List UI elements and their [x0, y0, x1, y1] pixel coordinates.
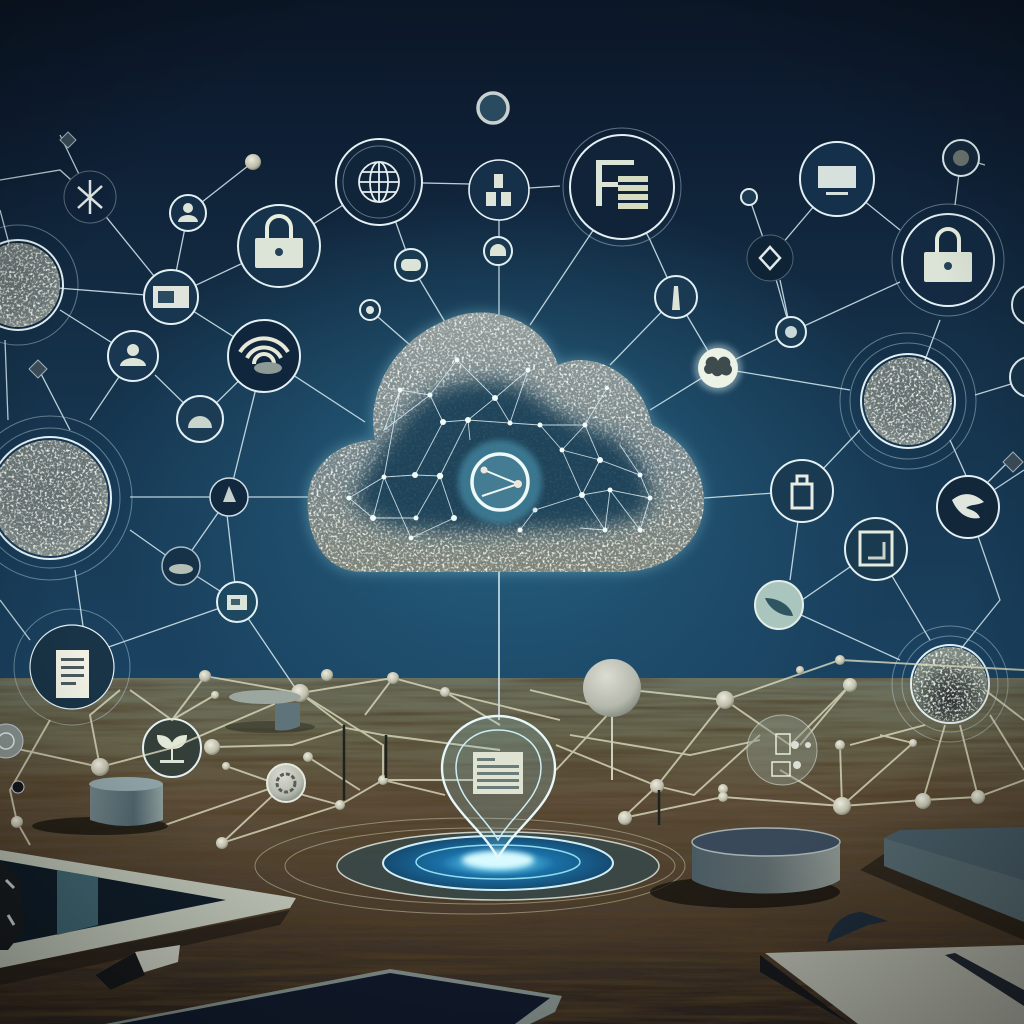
node: upper-left sphere [0, 225, 78, 345]
cable knot left [0, 860, 24, 950]
icon: padlock left [238, 205, 320, 287]
hologram map pin [442, 716, 555, 858]
tablet bottom [105, 969, 562, 1024]
cloud glow [308, 312, 704, 572]
icon: person badge [170, 195, 206, 231]
icon: left lens node [0, 724, 23, 758]
icon: top hollow ball [478, 93, 508, 123]
icon: molecule [64, 171, 116, 223]
stylus cap [827, 912, 888, 943]
node: lower-right sphere [892, 626, 1008, 742]
cloud centre hub [458, 440, 542, 524]
icon: right edge upper partial node [1012, 285, 1024, 325]
desk net lines [0, 676, 560, 845]
desk white ball on post [583, 659, 641, 780]
icon: plant node [143, 719, 201, 777]
icon: small ring left [360, 300, 380, 320]
pen left [95, 945, 180, 990]
desk posts [344, 725, 659, 825]
icon: person [108, 331, 158, 381]
desk net nodes [11, 655, 985, 849]
icon: image card [144, 270, 198, 324]
icon: desk lens node [267, 764, 305, 802]
icon: small diamonds [29, 132, 1023, 472]
icon: tower [655, 276, 697, 318]
hologram rings and base [255, 818, 685, 914]
central cloud [308, 312, 704, 572]
icon: faint holographic node [747, 715, 817, 785]
icon: small ball top-left [245, 154, 261, 170]
icon: hat node [162, 547, 200, 585]
icon: chip node [395, 249, 427, 281]
notebook bottom right [760, 945, 1024, 1024]
desk pill cylinder [225, 690, 315, 733]
laptop right [860, 827, 1024, 940]
icon: cloud badge [177, 396, 223, 442]
desk network [0, 655, 1024, 849]
icon: tablet node [217, 582, 257, 622]
wooden desk [0, 678, 1024, 1024]
icon: dark puzzle node [747, 235, 793, 281]
icon: building hub [469, 160, 529, 220]
icon: wifi [228, 320, 300, 392]
desk grey cylinder [32, 777, 168, 835]
node: right large sphere [840, 333, 976, 469]
desk dark puck [650, 828, 840, 908]
icon: document list [563, 128, 681, 246]
icon: document left [14, 609, 130, 725]
cloud mesh nodes [346, 358, 652, 540]
icon: globe [336, 139, 422, 225]
background wall [0, 0, 1024, 700]
icon: right edge partial node [1010, 357, 1024, 397]
icon: pill node [484, 237, 512, 265]
icon: monitor [800, 142, 874, 216]
icon: top right small [943, 140, 979, 176]
icon: small dark desk ball [12, 781, 24, 793]
icon: droplet node [210, 478, 248, 516]
node: left large sphere [0, 416, 132, 580]
icon: small open node [741, 189, 757, 205]
icon: leaf node [755, 581, 803, 629]
wall halo [85, 190, 925, 770]
cloud inner shade [352, 380, 651, 532]
tablet left [0, 850, 296, 985]
network connection lines [0, 135, 1024, 720]
cloud mesh [349, 360, 650, 538]
icon: ring node [776, 317, 806, 347]
cloud body [308, 312, 704, 572]
icon: padlock square node [771, 460, 833, 522]
icon: bright white node [694, 344, 742, 392]
icon: padlock right [892, 204, 1004, 316]
icon: framed square [845, 518, 907, 580]
icon: knot node [937, 476, 999, 538]
